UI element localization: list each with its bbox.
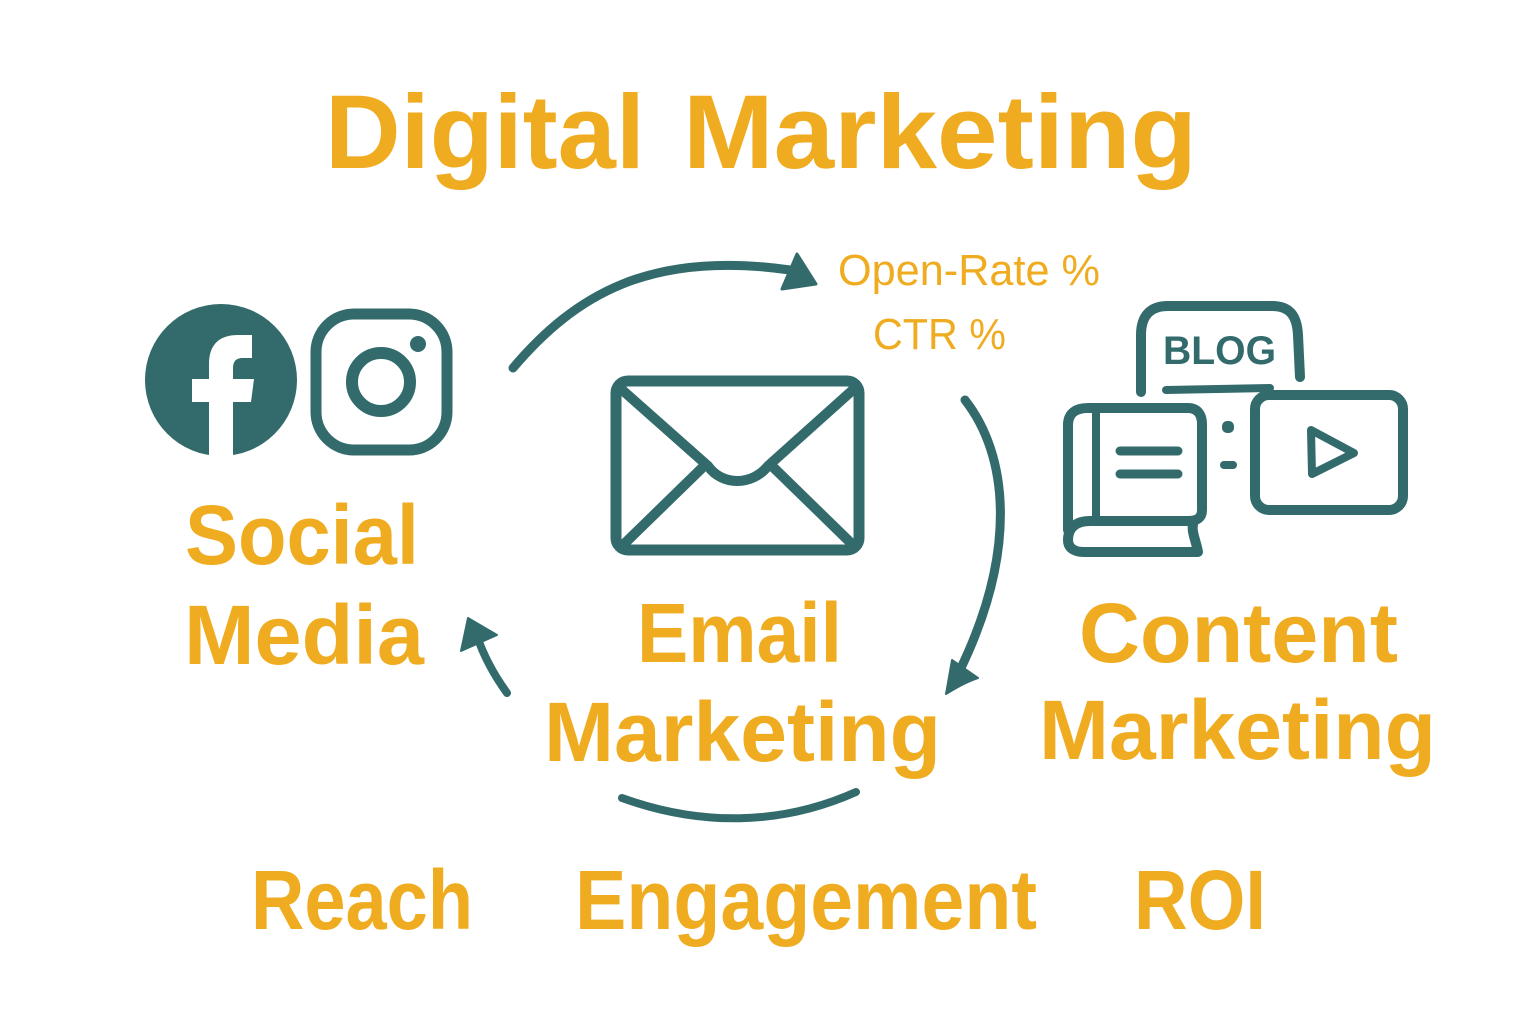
label: content marketing: Content — [1079, 586, 1398, 680]
icon: connector dots — [1220, 421, 1237, 469]
metric: reach: Reach — [251, 853, 473, 947]
label: email marketing: Marketing — [544, 685, 941, 779]
title: Digital — [325, 74, 645, 191]
icon: book — [1068, 408, 1202, 552]
icon: blog card: BLOG — [1163, 329, 1276, 373]
title — [325, 74, 1197, 191]
arrow: metrics to email — [946, 400, 1000, 694]
label: email marketing: Email — [637, 586, 842, 680]
arrow: social media to open rate — [513, 254, 816, 368]
metric: engagement: Engagement — [575, 853, 1037, 947]
metric: roi: ROI — [1134, 853, 1266, 947]
email metrics: CTR % — [873, 310, 1006, 359]
arrow: to social media — [461, 618, 507, 693]
label: social media: Social — [185, 488, 419, 582]
label: content marketing — [1039, 586, 1436, 777]
label: social media: Media — [184, 588, 425, 682]
email metrics: Open-Rate % — [838, 246, 1100, 295]
label: social media — [184, 488, 425, 682]
email metrics — [838, 246, 1100, 359]
label: email marketing — [544, 586, 941, 779]
title: Marketing — [683, 74, 1197, 191]
icon: facebook — [145, 304, 297, 456]
icon: envelope — [616, 381, 859, 550]
icon: video player — [1255, 395, 1403, 510]
arrow: lower curve — [622, 792, 856, 818]
icon: instagram — [316, 314, 447, 450]
label: content marketing: Marketing — [1039, 683, 1436, 777]
icon: blog card — [1141, 306, 1300, 392]
